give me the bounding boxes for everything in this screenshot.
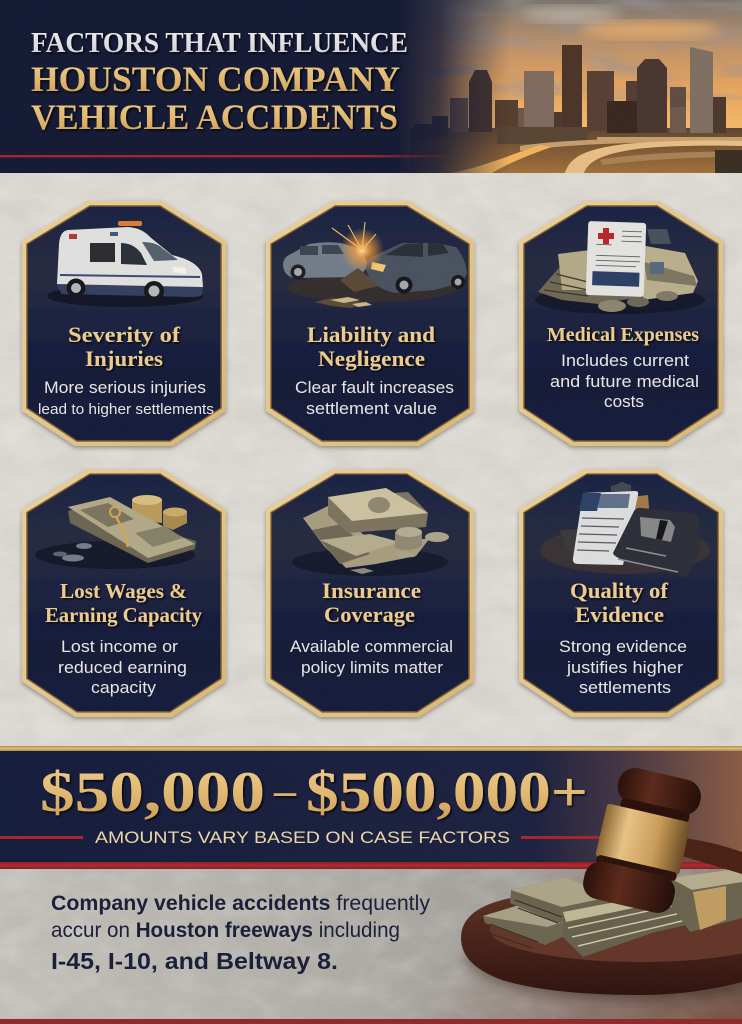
settlement amount: – xyxy=(273,768,297,813)
title line: factors that influence: FACTORS THAT INFLUENCE xyxy=(31,27,408,59)
icon: stacks of cash and coins xyxy=(292,488,449,576)
line three: I-45, I-10, and Beltway 8. xyxy=(51,948,338,974)
description xyxy=(58,638,187,697)
card frame xyxy=(519,201,723,446)
gavel head xyxy=(583,768,701,913)
settlement amount: $50,000 xyxy=(40,761,265,824)
gavel on cash xyxy=(461,762,742,1000)
description: Includes current xyxy=(561,352,689,370)
heading: Severity of xyxy=(68,322,181,347)
heading: Insurance xyxy=(322,578,421,603)
settlement range band xyxy=(0,746,742,869)
line one: Company vehicle accidents frequently xyxy=(51,892,431,915)
description: Lost income or xyxy=(61,638,179,656)
description: and future medical xyxy=(550,373,699,391)
panel: insurance coverage xyxy=(266,469,474,717)
description xyxy=(559,638,687,697)
heading: Medical Expenses xyxy=(547,324,699,346)
heading: Earning Capacity xyxy=(45,603,202,627)
header banner xyxy=(0,0,742,173)
icon: two crashed cars xyxy=(283,222,467,308)
heading: Coverage xyxy=(324,602,415,627)
title xyxy=(31,27,408,137)
freeway note xyxy=(51,892,431,974)
icon: cash, coins and key xyxy=(35,495,196,569)
description xyxy=(38,379,214,418)
description xyxy=(295,379,454,418)
panel: quality of evidence xyxy=(519,469,723,717)
description: More serious injuries xyxy=(44,379,206,397)
red rule left xyxy=(0,836,83,839)
heading: Quality of xyxy=(570,578,669,603)
description: lead to higher settlements xyxy=(38,401,214,418)
description: settlement value xyxy=(306,400,437,418)
description xyxy=(290,638,453,677)
heading: Injuries xyxy=(85,346,163,371)
panel: liability and negligence xyxy=(266,201,474,446)
description: Clear fault increases xyxy=(295,379,454,397)
heading: Liability and xyxy=(307,322,435,347)
heading xyxy=(307,322,435,371)
card frame xyxy=(519,469,723,717)
card frame xyxy=(266,201,474,446)
title line: vehicle accidents: VEHICLE ACCIDENTS xyxy=(31,97,398,137)
gavel handle xyxy=(682,838,742,874)
icon: white ambulance van xyxy=(47,221,203,307)
heading: Evidence xyxy=(575,602,664,627)
description: justifies higher xyxy=(566,659,684,677)
settlement amount xyxy=(40,761,588,824)
description: settlements xyxy=(579,679,671,697)
heading: Lost Wages & xyxy=(60,579,187,603)
description: capacity xyxy=(91,679,157,697)
title line: houston company: HOUSTON COMPANY xyxy=(31,59,400,99)
lower concrete section xyxy=(0,869,742,1024)
skyline photo xyxy=(380,0,742,173)
panel: lost wages and earning capacity xyxy=(22,469,226,717)
description: reduced earning xyxy=(58,659,187,677)
settlement caption: AMOUNTS VARY BASED ON CASE FACTORS xyxy=(95,829,510,847)
panel: severity of injuries xyxy=(22,201,226,446)
heading xyxy=(68,322,181,371)
heading xyxy=(570,578,669,627)
line two: accur on Houston freeways including xyxy=(51,919,400,942)
heading: Negligence xyxy=(318,346,425,371)
description xyxy=(550,352,699,411)
description: Available commercial xyxy=(290,638,453,656)
description: policy limits matter xyxy=(301,659,444,677)
description: Strong evidence xyxy=(559,638,687,656)
card frame xyxy=(22,201,226,446)
heading xyxy=(322,578,421,627)
icon: clipboard report and dash camera xyxy=(540,482,710,577)
panel: medical expenses xyxy=(519,201,723,446)
red rule right xyxy=(521,836,601,839)
heading xyxy=(45,579,202,627)
card frame xyxy=(266,469,474,717)
gavel sounding block xyxy=(461,898,742,1000)
settlement amount: $500,000+ xyxy=(306,761,588,824)
icon: medical form on cash and coins xyxy=(535,221,705,314)
description: costs xyxy=(604,393,644,411)
cash stacks xyxy=(483,868,742,957)
card frame xyxy=(22,469,226,717)
